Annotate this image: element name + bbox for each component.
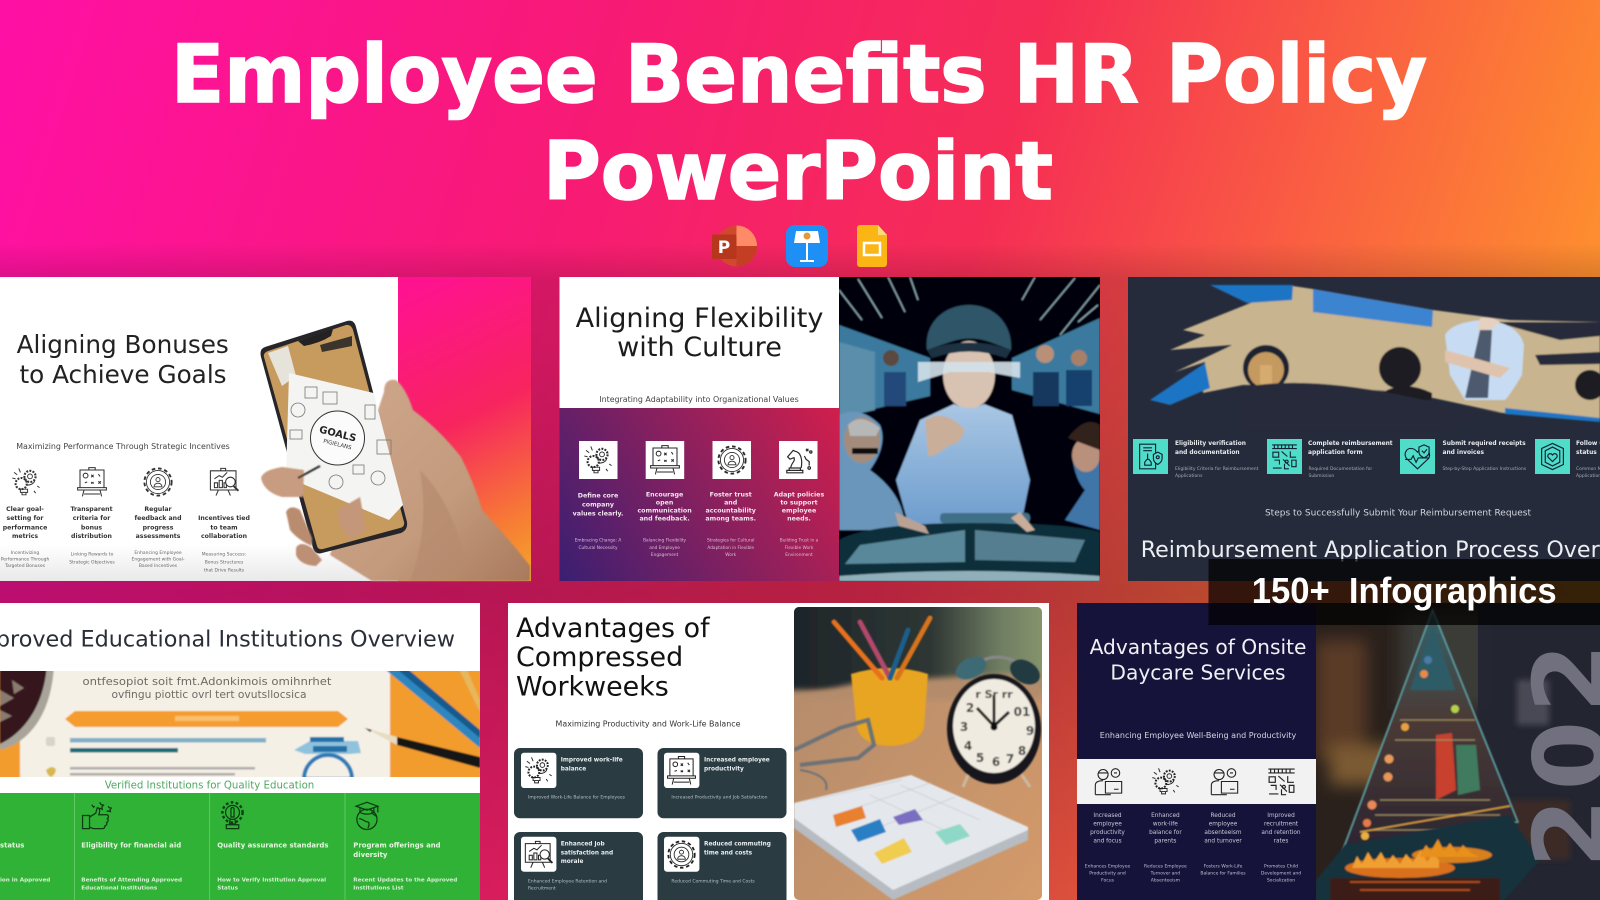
captions: absenteeism (1204, 830, 1242, 836)
glasses (794, 720, 874, 790)
captions: setting for (7, 515, 44, 522)
icon band (1077, 759, 1316, 804)
captions: and (724, 500, 737, 507)
card: commuting: Reduced Commuting Time and Costs (671, 878, 755, 884)
supporting notes: Reduces Employee (1144, 864, 1187, 870)
captions: status (0, 841, 24, 849)
captions: open (656, 500, 673, 507)
captions: employee (1209, 821, 1238, 827)
captions: accountability (706, 508, 756, 515)
step notes: Submission (1308, 473, 1334, 479)
subtitle (0, 777, 480, 793)
alarm clock: 2 (966, 701, 974, 715)
subtitle: Maximizing Performance Through Strategic Incentives (16, 442, 230, 451)
person: blonde agent (1243, 345, 1289, 391)
step titles: Submit required receipts (1442, 441, 1526, 447)
heading (576, 303, 823, 363)
icon row (12, 468, 238, 496)
subtitle: Verified Institutions for Quality Education (105, 781, 314, 792)
captions: distribution (71, 533, 112, 540)
supporting notes: Flexible Work (785, 545, 814, 551)
supporting notes: Engagement (651, 552, 679, 558)
panel: Aligning Bonuses (0, 277, 531, 581)
subtitle: Steps to Successfully Submit Your Reimbursement Request (1265, 509, 1531, 519)
captions: rates (1274, 838, 1288, 844)
notes: How to Verify Institution Approval (217, 878, 326, 884)
heading: Aligning Flexibility (576, 303, 823, 334)
captions: productivity (1090, 830, 1125, 836)
alarm clock: 01 (1014, 705, 1030, 719)
step row (1133, 439, 1600, 479)
platform with glowing city (1316, 815, 1540, 900)
phone (260, 321, 407, 553)
icon: PowerPoint (712, 226, 757, 266)
supporting notes: Work (725, 552, 737, 558)
card: satisfaction: Enhanced Employee Retention and (528, 878, 607, 884)
captions (1090, 813, 1301, 844)
photo: glass pyramid (1316, 603, 1600, 900)
alarm clock: 7 (1006, 752, 1014, 766)
supporting notes: Enhancing Employee (134, 550, 182, 556)
title (171, 28, 1427, 218)
heading: Compressed (516, 642, 683, 673)
captions: diversity (353, 851, 388, 859)
captions: employee (1093, 821, 1122, 827)
supporting notes: Engagement with Goal- (132, 556, 185, 562)
captions: balance for (1149, 830, 1182, 836)
card: satisfaction: Recruitment (528, 886, 556, 892)
captions (3, 506, 250, 540)
captions: Eligibility for financial aid (81, 841, 181, 849)
captions: Transparent (70, 506, 113, 513)
notes (0, 878, 457, 892)
step notes: Applications (1175, 473, 1203, 479)
step notes: Step-by-Step Application Instructions (1442, 466, 1527, 472)
captions: criteria for (73, 515, 111, 522)
supporting notes: Targeted Bonuses (4, 563, 46, 569)
captions: needs. (787, 516, 811, 523)
captions: Clear goal- (6, 506, 44, 513)
supporting notes: and Employee (649, 545, 680, 551)
card: work-life: Improved work-life (561, 758, 623, 764)
card: work-life: Improved Work-Life Balance for Employees (528, 794, 626, 800)
alarm clock: 8 (1018, 744, 1026, 758)
captions: communication (637, 508, 692, 515)
supporting notes (575, 538, 819, 558)
captions: metrics (12, 533, 38, 540)
card: work-life: balance (561, 766, 586, 772)
captions: to team (210, 524, 238, 532)
alarm clock: 4 (964, 739, 972, 753)
captions: Incentives tied (198, 515, 250, 522)
captions: Quality assurance standards (217, 841, 328, 849)
banner: 150+ Infographics: 150+ Infographics (1252, 570, 1557, 611)
brochure text: ontfesopiot soit fmt.Adonkimois omihnrhet (82, 675, 332, 688)
step notes: Eligibility Criteria for Reimbursement (1175, 466, 1259, 472)
step titles: and invoices (1442, 450, 1485, 456)
panel: Approved Educational Institutions (0, 603, 480, 900)
supporting notes: that Drive Results (204, 568, 245, 574)
supporting notes: Focus (1101, 878, 1115, 884)
supporting notes: Environment (785, 552, 813, 558)
notes: Recent Updates to the Approved (353, 878, 457, 884)
captions: Increased (1093, 813, 1122, 819)
notes: Benefits of Attending Approved (81, 878, 182, 884)
captions: employee (782, 508, 816, 515)
card: productivity: productivity (704, 766, 744, 772)
card: satisfaction (514, 832, 643, 900)
supporting notes: Cultural Necessity (578, 545, 618, 551)
alarm clock: 3 (960, 720, 968, 734)
supporting notes (1, 550, 246, 574)
step titles: and documentation (1175, 450, 1240, 456)
banner: 150+ Infographics (1208, 559, 1600, 625)
supporting notes: Building Trust in a (780, 538, 819, 544)
captions: work-life (1153, 821, 1178, 827)
panel: Advantages of Compressed Workweeks (508, 600, 1055, 900)
photo: alarm clock and planner (794, 607, 1042, 900)
heading: Aligning Bonuses (17, 330, 229, 359)
supporting notes: Based Incentives (139, 563, 178, 569)
captions: bonus (81, 524, 102, 532)
supporting notes: Turnover and (1150, 870, 1180, 876)
step titles (1175, 441, 1600, 456)
card: work-life (514, 748, 643, 818)
photo: hand holding phone (260, 321, 530, 581)
notes: ion in Approved (0, 878, 50, 884)
person: standing man (1445, 318, 1524, 400)
step notes (1175, 466, 1600, 479)
title: Employee Benefits HR Policy (171, 28, 1427, 121)
panel: Aligning Flexibility with Culture (560, 277, 1100, 585)
card: productivity (658, 748, 786, 818)
supporting notes: Embracing Change: A (575, 538, 621, 544)
card: satisfaction: satisfaction and (561, 850, 613, 856)
captions: collaboration (201, 533, 247, 540)
icon tiles (579, 441, 818, 479)
captions: performance (3, 524, 47, 532)
brochure text (83, 677, 332, 700)
supporting notes: Socialization (1267, 878, 1295, 884)
card: satisfaction: morale (561, 859, 583, 865)
icon: Keynote (786, 225, 828, 267)
captions: and retention (1261, 830, 1301, 836)
supporting notes: Performance Through (1, 556, 49, 562)
supporting notes: Adaptation in Flexible (707, 545, 754, 551)
supporting notes: Productivity and (1089, 870, 1126, 876)
green benefits band (0, 793, 480, 900)
card: commuting: Reduced commuting (704, 842, 771, 848)
heading: with Culture (617, 332, 782, 363)
captions: recruitment (1264, 821, 1299, 827)
captions: Program offerings and (353, 841, 441, 849)
captions (573, 492, 824, 523)
phone: GOALS (318, 425, 357, 444)
fingers (261, 466, 366, 566)
supporting notes: Enhances Employee (1085, 864, 1130, 870)
captions: Reduced (1210, 813, 1236, 819)
captions: assessments (136, 533, 181, 540)
captions: Adapt policies (774, 492, 824, 499)
captions: and focus (1093, 838, 1122, 844)
icon tiles (1133, 439, 1570, 474)
captions: Encourage (646, 492, 683, 499)
captions: and feedback. (639, 516, 690, 523)
step titles: Eligibility verification (1175, 441, 1246, 447)
heading (1090, 635, 1306, 684)
captions: Improved (1267, 813, 1295, 819)
alarm clock: 5 (976, 751, 984, 765)
panel: Advantages of Onsite Daycare (1077, 603, 1600, 900)
supporting notes: Incentivizing (11, 550, 39, 556)
icon: PowerPoint: P (718, 238, 730, 258)
captions: progress (143, 524, 174, 532)
captions: Define core (578, 492, 618, 499)
subtitle: Maximizing Productivity and Work-Life Balance (556, 720, 741, 729)
card: productivity: Increased Productivity and Job Satisfaction (671, 794, 768, 800)
supporting notes (1085, 864, 1301, 884)
heading: Daycare Services (1110, 660, 1286, 684)
supporting notes: Absenteeism (1151, 878, 1180, 884)
supporting notes: Strategic Objectives (69, 560, 115, 566)
app icons row (712, 225, 887, 267)
photo: call centre collage (1150, 285, 1600, 430)
supporting notes: Strategies for Cultural (707, 538, 754, 544)
brochure text: ovfingu piottic ovrl tert ovutsllocsica (112, 688, 306, 701)
step titles: application form (1308, 450, 1363, 456)
captions: and turnover (1204, 838, 1242, 844)
heading: to Achieve Goals (19, 360, 227, 389)
alarm clock: 9 (1026, 724, 1034, 738)
captions: Enhanced (1151, 813, 1180, 819)
notes: Educational Institutions (81, 886, 158, 892)
step titles: Complete reimbursement (1308, 441, 1393, 447)
captions: Foster trust (710, 492, 752, 499)
captions: company (582, 502, 614, 509)
captions (0, 841, 441, 859)
supporting notes: Development and (1261, 870, 1301, 876)
supporting notes: Balancing Flexibility (643, 538, 687, 544)
photo: woman with holographic screens (839, 277, 1100, 585)
card: commuting (658, 832, 786, 900)
person: agent with headset (1378, 347, 1432, 400)
supporting notes: Balance for Families (1200, 870, 1246, 876)
captions: values clearly. (573, 511, 623, 518)
heading: Advantages of (516, 613, 710, 644)
title: PowerPoint (543, 125, 1053, 218)
phone: PIGIELANS (323, 439, 352, 452)
captions: parents (1154, 838, 1176, 844)
supporting notes: Bonus Structures (205, 560, 244, 566)
planner (794, 775, 1028, 900)
panel: Reimbursement Application Process (1128, 277, 1600, 581)
alarm clock (947, 652, 1044, 787)
photo: brochure on desk (0, 671, 480, 777)
subtitle: Enhancing Employee Well-Being and Productivity (1100, 731, 1296, 740)
alarm clock: r Sr rr (975, 688, 1013, 701)
heading (516, 613, 710, 702)
heading (17, 330, 229, 389)
supporting notes: Fosters Work-Life (1204, 864, 1243, 870)
card: satisfaction: Enhanced job (561, 842, 605, 848)
alarm clock: 6 (992, 755, 1000, 769)
icon: Google Slides (857, 225, 887, 267)
notes: Institutions List (353, 886, 404, 892)
notes: Status (217, 886, 239, 892)
heading: Workweeks (516, 671, 669, 702)
pyramid (1342, 610, 1518, 852)
captions: feedback and (134, 515, 182, 522)
step notes: Required Documentation for (1308, 466, 1372, 472)
step titles: status (1576, 450, 1597, 456)
supporting notes: Measuring Success: (202, 552, 246, 558)
captions: among teams. (705, 516, 756, 523)
captions: Regular (144, 506, 173, 513)
card: productivity: Increased employee (704, 758, 770, 764)
subtitle: Integrating Adaptability into Organizational Values (599, 395, 799, 404)
supporting notes: Promotes Child (1264, 864, 1298, 870)
icons (83, 802, 378, 829)
heading: Advantages of Onsite (1090, 635, 1306, 659)
card: commuting: time and costs (704, 850, 753, 856)
supporting notes: Linking Rewards to (71, 552, 114, 558)
captions: to support (780, 500, 818, 507)
